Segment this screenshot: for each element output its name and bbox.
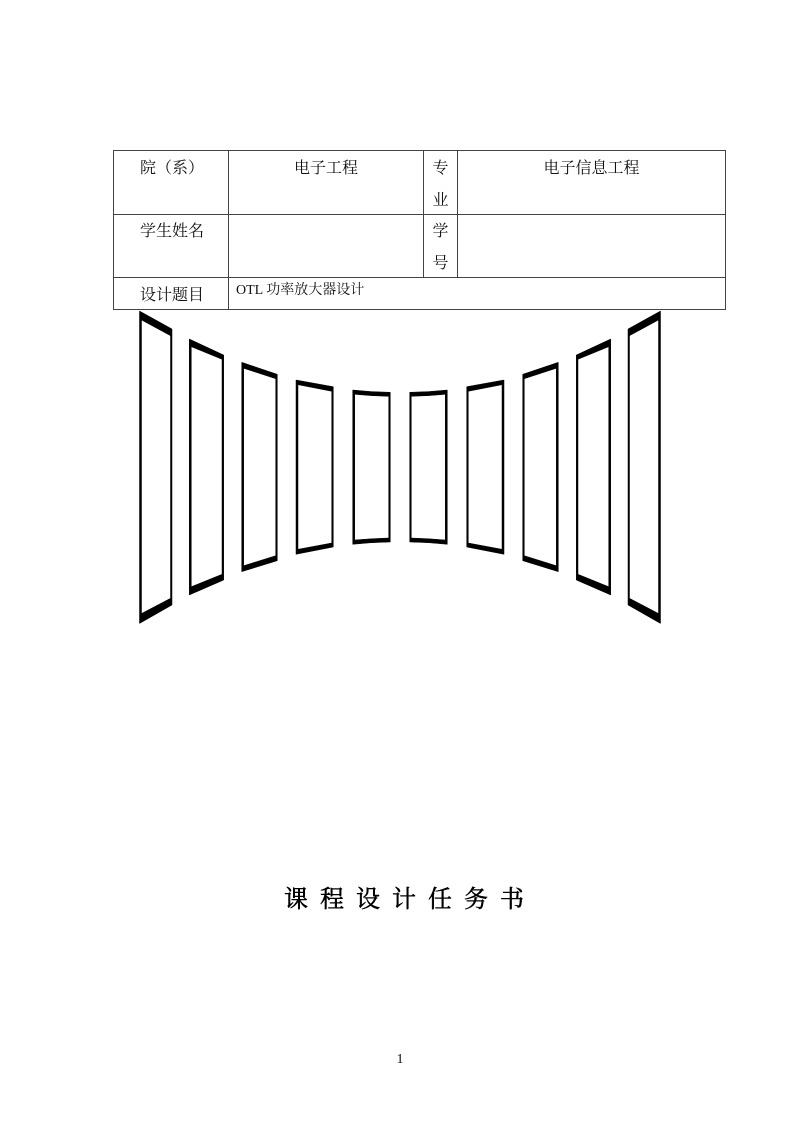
value: major: 电子信息工程 [543, 160, 640, 177]
document title: 课程设计任务书 [284, 887, 536, 913]
label: student number: 号 [432, 255, 448, 272]
frame 5 [353, 390, 390, 544]
frame 3 [242, 362, 277, 572]
label: major: 业 [432, 192, 448, 209]
label: major [432, 159, 448, 209]
frame 8 [523, 362, 558, 572]
label: student number: 学 [432, 223, 448, 240]
frame 10 [628, 311, 660, 624]
frame 6 [410, 390, 447, 544]
label: design topic: 设计题目 [140, 287, 204, 304]
label: department: 院（系） [140, 160, 204, 177]
label: major: 专 [432, 160, 448, 177]
frame 1 [140, 311, 172, 624]
value: design topic: OTL 功率放大器设计 [236, 283, 364, 298]
frame 7 [467, 380, 504, 554]
frame 9 [576, 339, 611, 595]
value: department: 电子工程 [294, 160, 358, 177]
frame 2 [189, 339, 224, 595]
frame 4 [296, 380, 333, 554]
label: student number [432, 222, 448, 272]
info table [113, 150, 726, 310]
page number: 1 [396, 1052, 404, 1067]
label: student name: 学生姓名 [140, 223, 204, 240]
